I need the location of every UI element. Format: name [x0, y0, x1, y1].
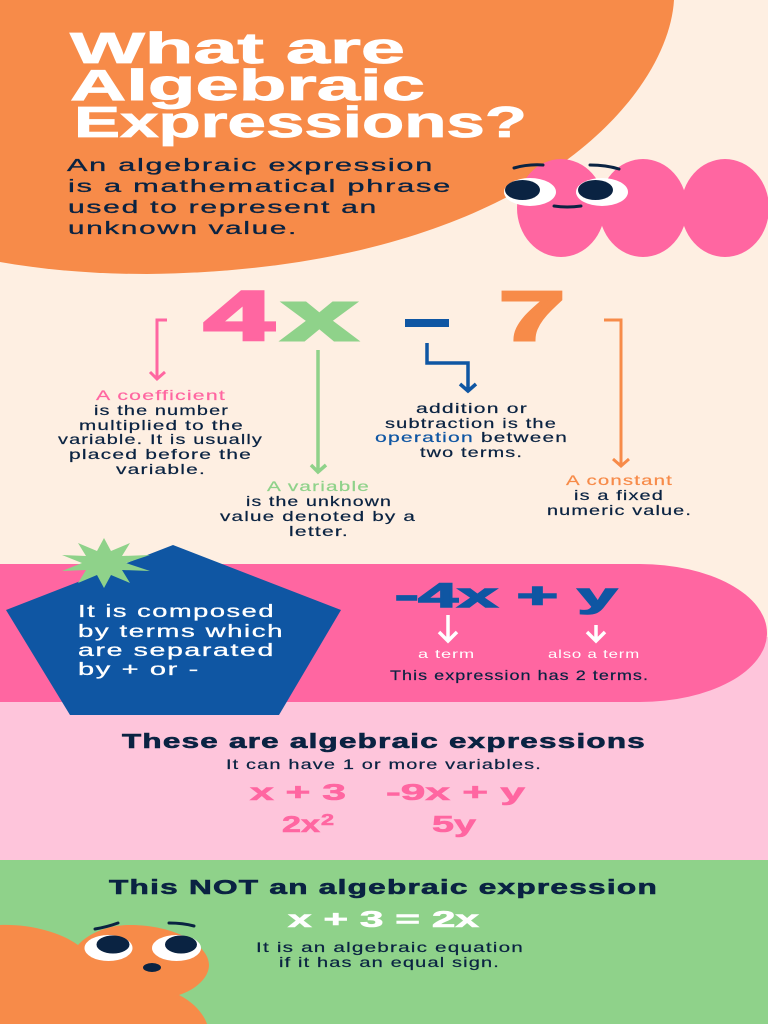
term labels: also a term: [548, 647, 640, 661]
example expressions: 2: [321, 812, 334, 829]
arrow: constant: [604, 320, 629, 466]
pentagon text: by terms which: [78, 621, 284, 641]
icon: green star: [62, 538, 150, 588]
text: operation: subtraction is the: [385, 415, 557, 431]
intro paragraph: is a mathematical phrase: [68, 176, 452, 196]
equation note: [256, 939, 524, 970]
text: variable: value denoted by a: [220, 508, 416, 524]
example expressions: [250, 779, 525, 837]
header orange shape: [0, 0, 674, 274]
formula: 4x - 7: [204, 277, 565, 355]
intro paragraph: unknown value.: [68, 218, 298, 238]
arrow: operation: [427, 343, 476, 391]
text: variable: letter.: [289, 523, 349, 539]
text: variable: [220, 478, 416, 539]
arrow: a term: [439, 615, 457, 641]
green section: [0, 860, 768, 1024]
formula: 4x - 7: x: [283, 277, 356, 355]
text: constant: is a fixed: [574, 487, 664, 503]
text: variable: is the unknown: [246, 493, 392, 509]
example expressions: -9x + y: [386, 779, 525, 805]
arrow: variable: [311, 350, 326, 472]
text: coefficient: A coefficient: [96, 387, 226, 403]
text: constant: [547, 472, 692, 518]
text: coefficient: placed before the: [69, 446, 252, 462]
terms note: This expression has 2 terms.: [390, 667, 649, 683]
expression: -4x + y: -4x + y: [395, 577, 617, 615]
term labels: a term: [418, 647, 475, 661]
text: operation: [375, 400, 568, 460]
title: [70, 24, 527, 147]
formula: 4x - 7: 4: [204, 277, 274, 355]
light pink section: [0, 637, 768, 860]
term labels: [418, 647, 640, 661]
text: coefficient: is the number: [94, 402, 229, 418]
text: constant: numeric value.: [547, 502, 692, 518]
equation note: if it has an equal sign.: [279, 954, 500, 970]
intro paragraph: used to represent an: [68, 197, 378, 217]
equation note: It is an algebraic equation: [256, 939, 524, 955]
pentagon callout: [6, 545, 341, 715]
example expressions: 5y: [432, 811, 476, 837]
text: operation: two terms.: [420, 444, 523, 460]
pentagon text: [78, 601, 284, 679]
text: coefficient: [58, 387, 263, 477]
formula: 4x - 7: 7: [499, 277, 565, 355]
text: operation: between: [481, 429, 568, 445]
text: coefficient: variable.: [116, 461, 206, 477]
example expressions: 2x: [282, 811, 320, 837]
pink band: [0, 564, 767, 702]
text: constant: A constant: [566, 472, 673, 488]
subheading: It can have 1 or more variables.: [226, 756, 542, 772]
title: Algebraic: [70, 61, 425, 110]
pentagon text: It is composed: [78, 601, 275, 621]
title: What are: [70, 24, 405, 73]
heading: these are algebraic expressions: These are algebraic expressions: [122, 731, 646, 753]
text: coefficient: multiplied to the: [79, 417, 244, 433]
pentagon text: are separated: [78, 640, 275, 660]
orange character: [0, 923, 209, 1024]
heading: not an algebraic expression: This NOT an algebraic expression: [109, 877, 658, 899]
pink character: [504, 159, 768, 257]
text: operation: addition or: [416, 400, 528, 416]
intro paragraph: [67, 155, 452, 238]
arrow: also a term: [587, 625, 605, 641]
pentagon text: by + or -: [78, 659, 200, 679]
equation: x + 3 = 2x: [288, 906, 479, 932]
text: operation: operation: [375, 429, 474, 445]
text: variable: A variable: [267, 478, 370, 494]
example expressions: x + 3: [250, 779, 346, 805]
arrow: coefficient: [150, 320, 167, 379]
intro paragraph: An algebraic expression: [67, 155, 434, 175]
text: coefficient: variable. It is usually: [58, 431, 263, 447]
title: Expressions?: [74, 98, 527, 147]
